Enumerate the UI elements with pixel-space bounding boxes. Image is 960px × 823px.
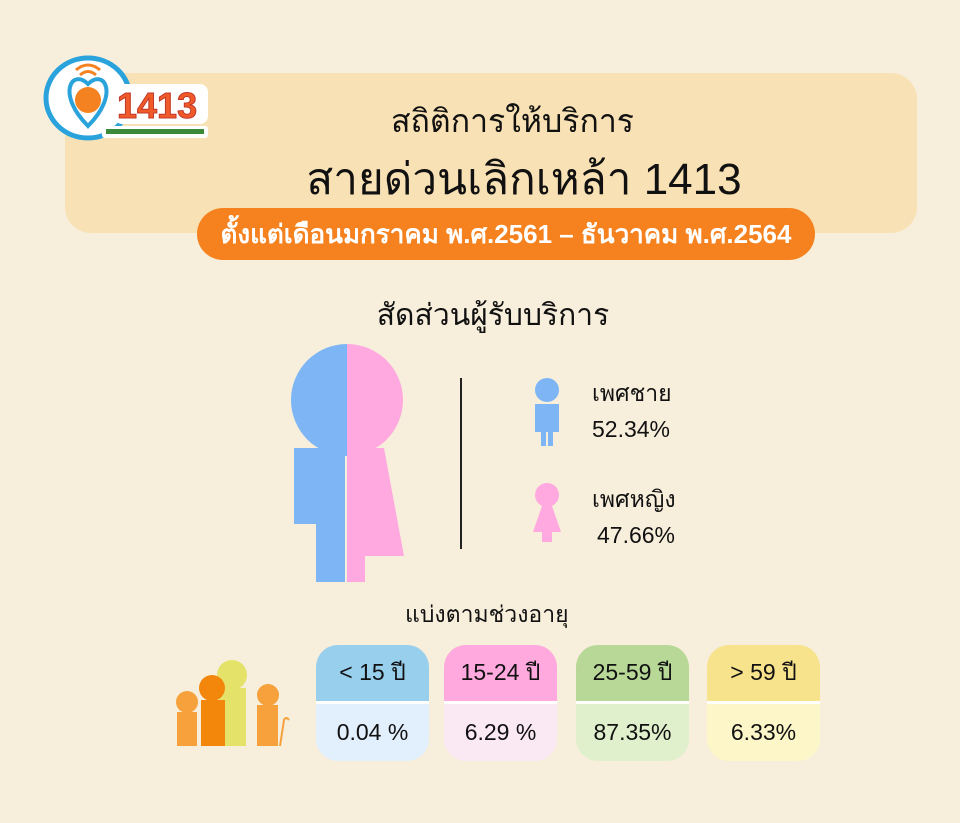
age box 2 (444, 645, 557, 761)
age box 3: 25-59 ปี (593, 659, 672, 685)
logo: 1413 (117, 85, 197, 126)
gender figure (291, 344, 404, 582)
age box 1: < 15 ปี (339, 659, 406, 685)
age box 3: 87.35% (593, 719, 672, 745)
legend female: เพศหญิง (592, 486, 676, 512)
logo (44, 56, 208, 140)
title: สถิติการให้บริการ (391, 103, 634, 139)
legend male: 52.34% (592, 416, 670, 442)
text: สายด่วนเลิกเหล้า 1413 (306, 155, 742, 204)
age box 2: 15-24 ปี (461, 659, 540, 685)
age box 3 (576, 645, 689, 761)
age box 1 (316, 645, 429, 761)
age box 1: 0.04 % (337, 719, 408, 745)
divider (460, 378, 462, 549)
age box 4: 6.33% (731, 719, 796, 745)
legend female: 47.66% (597, 522, 675, 548)
legend male: เพศชาย (592, 380, 672, 406)
age box 2: 6.29 % (465, 719, 536, 745)
icon: family (176, 660, 290, 746)
date pill (197, 208, 815, 260)
legend female (533, 483, 676, 548)
section heading: gender: สัดส่วนผู้รับบริการ (377, 299, 609, 332)
age box 4: > 59 ปี (730, 659, 797, 685)
header panel (65, 73, 917, 233)
date pill: ตั้งแต่เดือนมกราคม พ.ศ.2561 – ธันวาคม พ.ศ.2564 (221, 218, 791, 248)
age box 4 (707, 645, 820, 761)
section heading: age: แบ่งตามช่วงอายุ (405, 601, 569, 627)
legend male (535, 378, 672, 446)
